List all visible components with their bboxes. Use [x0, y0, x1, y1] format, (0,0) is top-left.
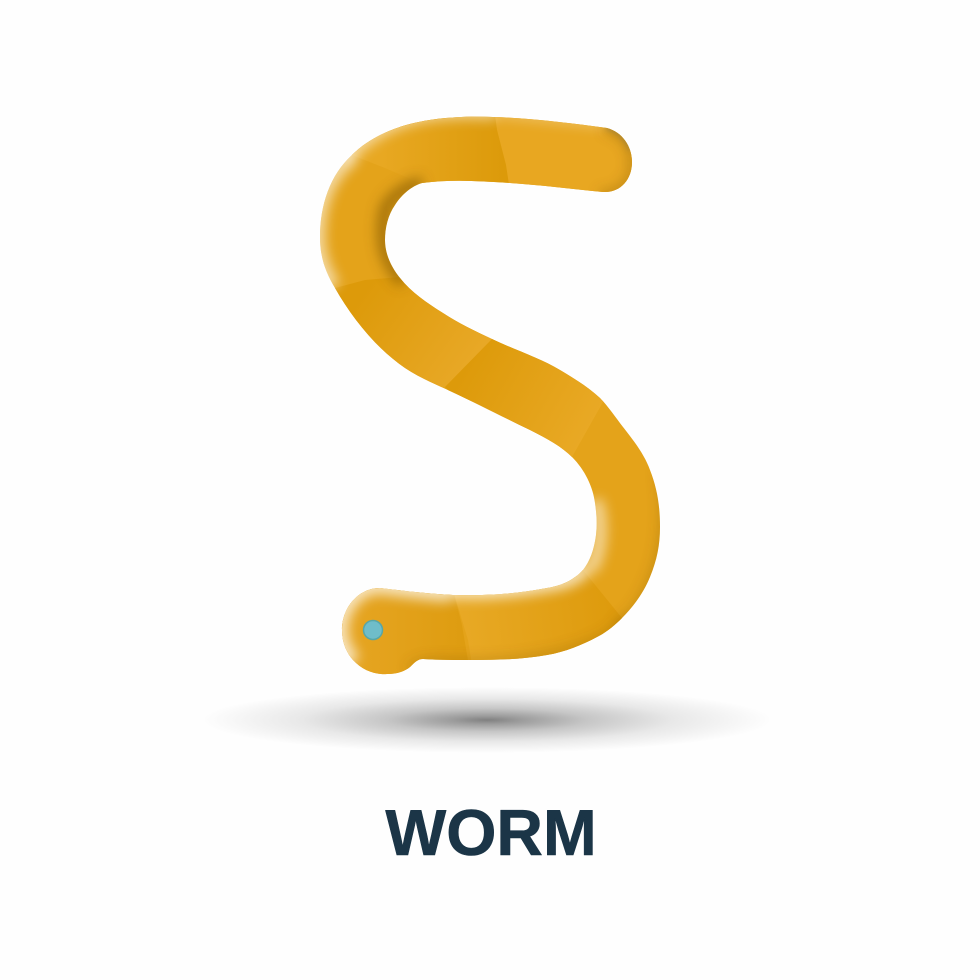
dark shading — [383, 128, 665, 670]
worm illustration — [320, 116, 660, 674]
eye — [364, 620, 382, 640]
title: WORM — [385, 797, 597, 869]
ground shadow — [202, 687, 772, 753]
infographic canvas — [239, 116, 736, 856]
cap corner tint — [606, 127, 631, 150]
worm body segments — [320, 116, 660, 674]
rim highlights — [316, 111, 605, 663]
